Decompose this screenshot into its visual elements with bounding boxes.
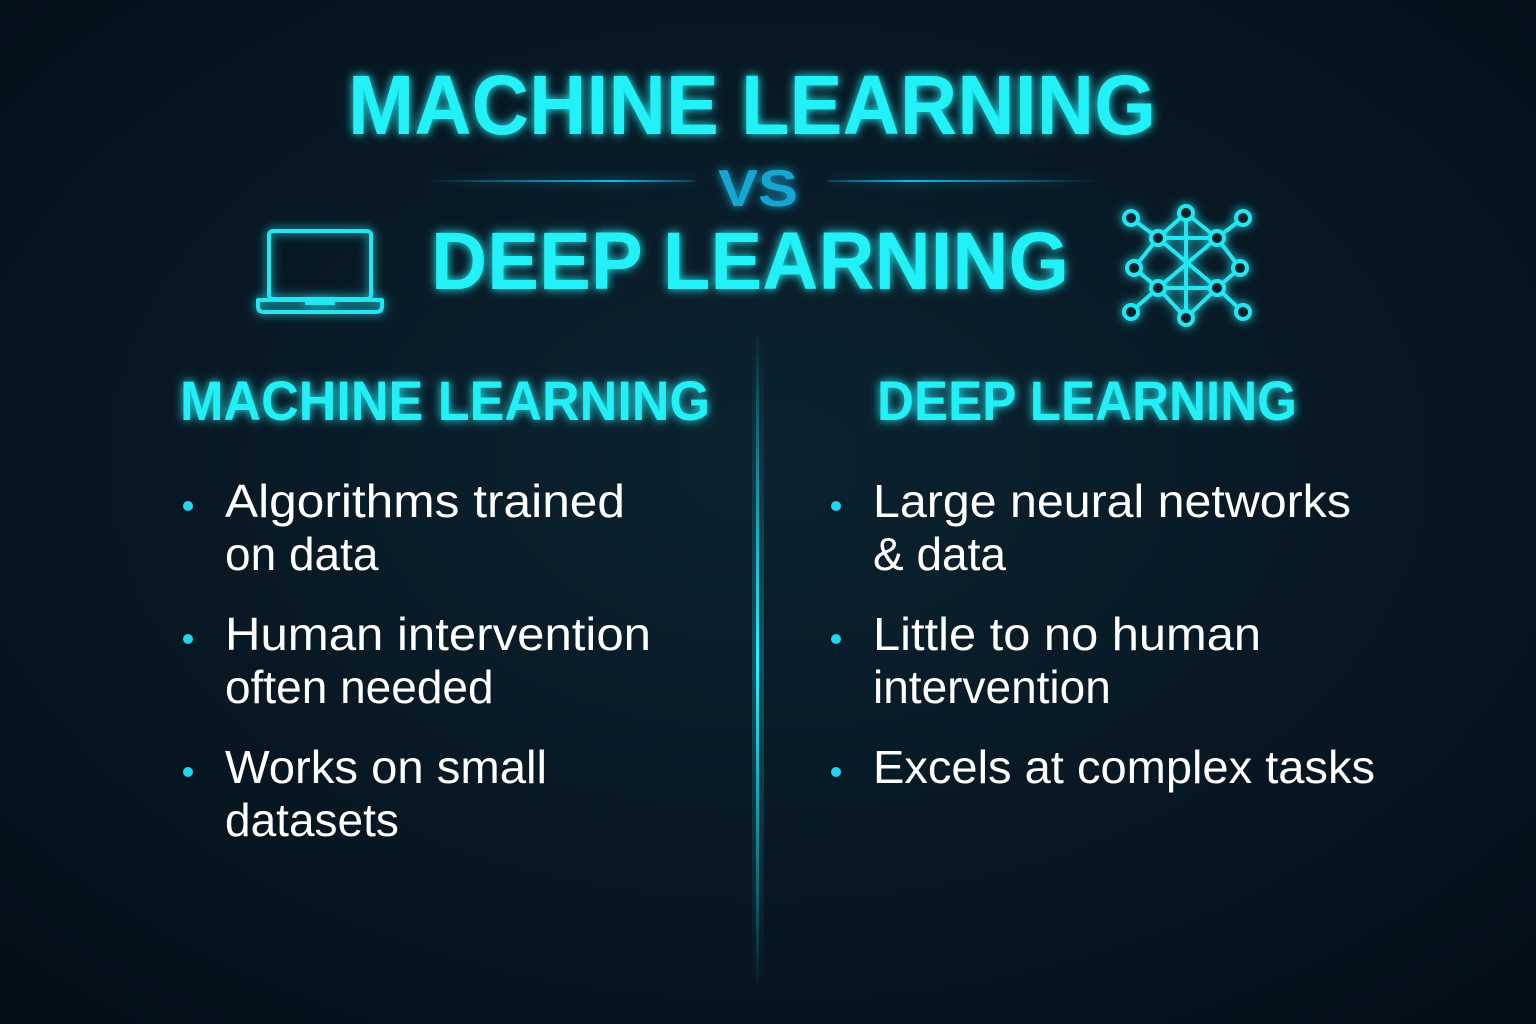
bullet list: deep learning: & data (873, 528, 1006, 580)
bullet list: machine learning: often needed (225, 661, 494, 713)
icon: neural network (1124, 206, 1250, 325)
title (348, 58, 1156, 307)
heading: deep learning: DEEP LEARNING (877, 369, 1297, 432)
heading: machine learning: MACHINE LEARNING (180, 369, 710, 432)
panel: machine learning (180, 369, 710, 846)
bullet list: machine learning: Works on small (225, 741, 547, 793)
panel: deep learning (831, 369, 1375, 793)
title: DEEP LEARNING (431, 216, 1069, 307)
title: MACHINE LEARNING (348, 58, 1156, 152)
bullet list: deep learning (831, 475, 1375, 793)
divider: vertical glow line (752, 330, 764, 990)
bullet list: machine learning: datasets (225, 794, 399, 846)
vs label: VS (718, 160, 798, 218)
bullet list: machine learning: Algorithms trained (225, 475, 625, 527)
bullet list: deep learning: Large neural networks (873, 475, 1351, 527)
bullet list: machine learning (183, 475, 651, 846)
bullet list: machine learning: Human intervention (225, 608, 651, 660)
bullet list: deep learning: Little to no human (873, 608, 1261, 660)
bullet list: machine learning: on data (225, 528, 379, 580)
bullet list: deep learning: Excels at complex tasks (873, 741, 1375, 793)
bullet list: deep learning: intervention (873, 661, 1111, 713)
icon: laptop (258, 231, 382, 312)
